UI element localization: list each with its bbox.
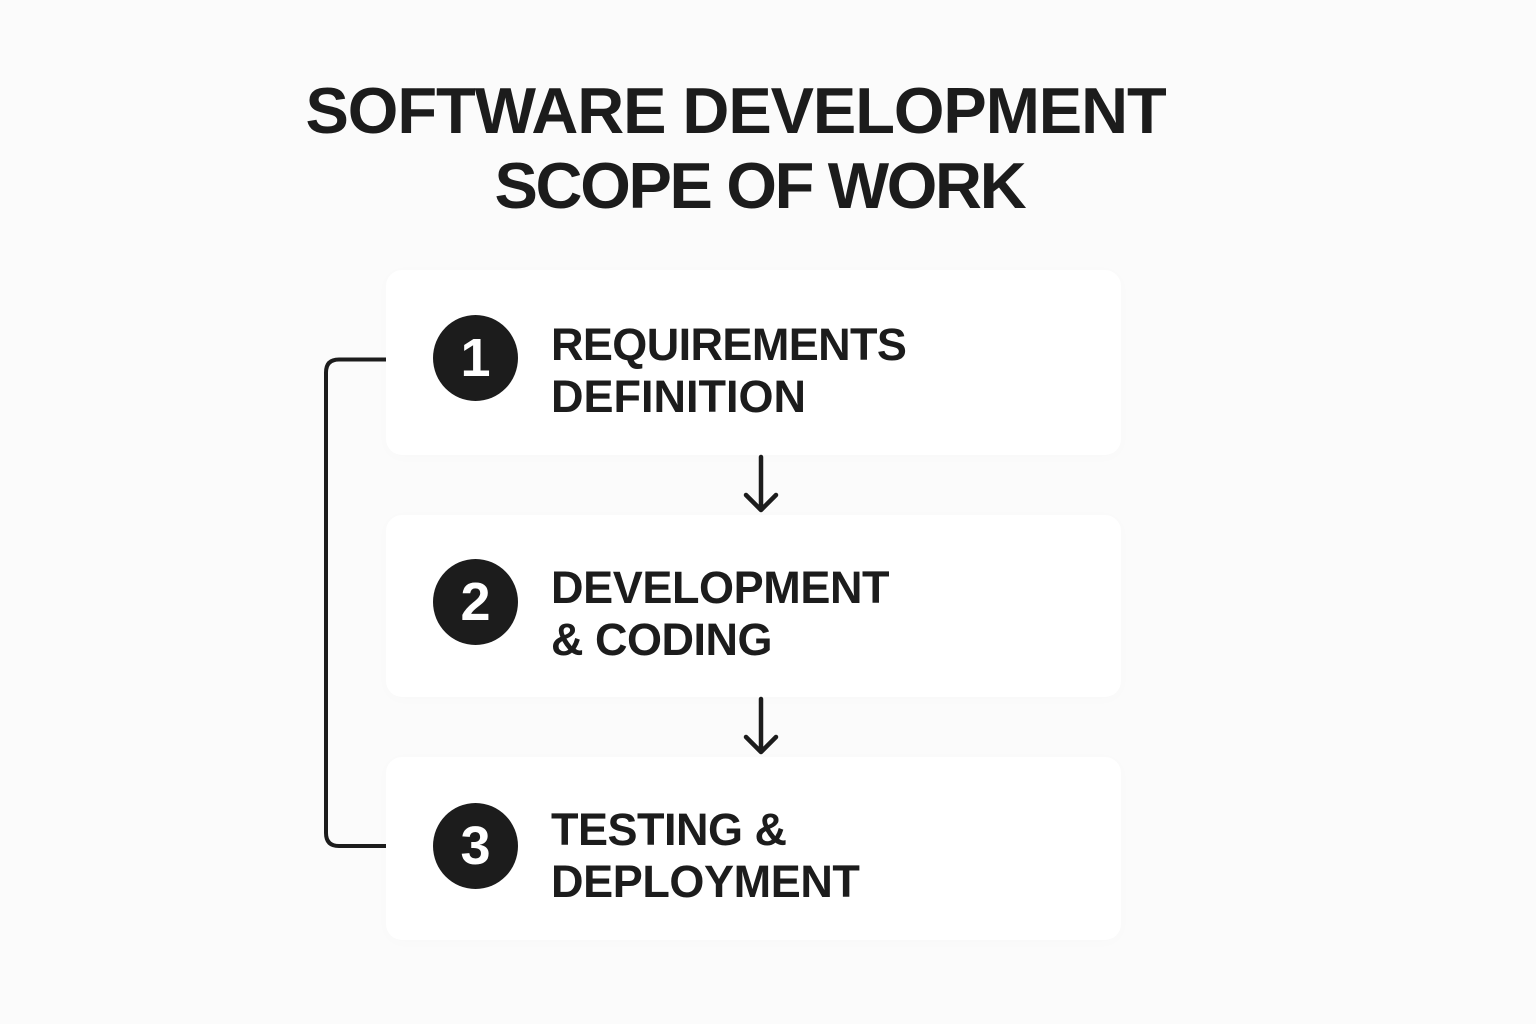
icon: number 1 badge: 1 <box>460 328 491 388</box>
panel: step 3 card <box>386 757 1121 940</box>
text: development and coding: & CODING <box>551 614 772 664</box>
title: SCOPE OF WORK <box>494 149 1024 222</box>
panel: step 1 card <box>386 270 1121 455</box>
text: testing and deployment: TESTING & <box>551 804 787 855</box>
text: development and coding: DEVELOPMENT <box>551 562 889 613</box>
icon: number 1 badge <box>433 315 518 401</box>
icon: number 2 badge <box>433 559 518 645</box>
icon: number 3 badge: 3 <box>460 816 491 876</box>
text: development and coding <box>551 562 889 664</box>
text: testing and deployment: DEPLOYMENT <box>551 856 860 906</box>
title <box>306 74 1166 222</box>
title: SOFTWARE DEVELOPMENT <box>306 74 1166 147</box>
text: testing and deployment <box>551 804 860 906</box>
panel: step 2 card <box>386 515 1121 697</box>
text: requirements definition <box>551 319 906 422</box>
icon: number 2 badge: 2 <box>460 572 491 632</box>
text: requirements definition: REQUIREMENTS <box>551 319 906 370</box>
icon: number 3 badge <box>433 803 518 889</box>
text: requirements definition: DEFINITION <box>551 370 806 422</box>
